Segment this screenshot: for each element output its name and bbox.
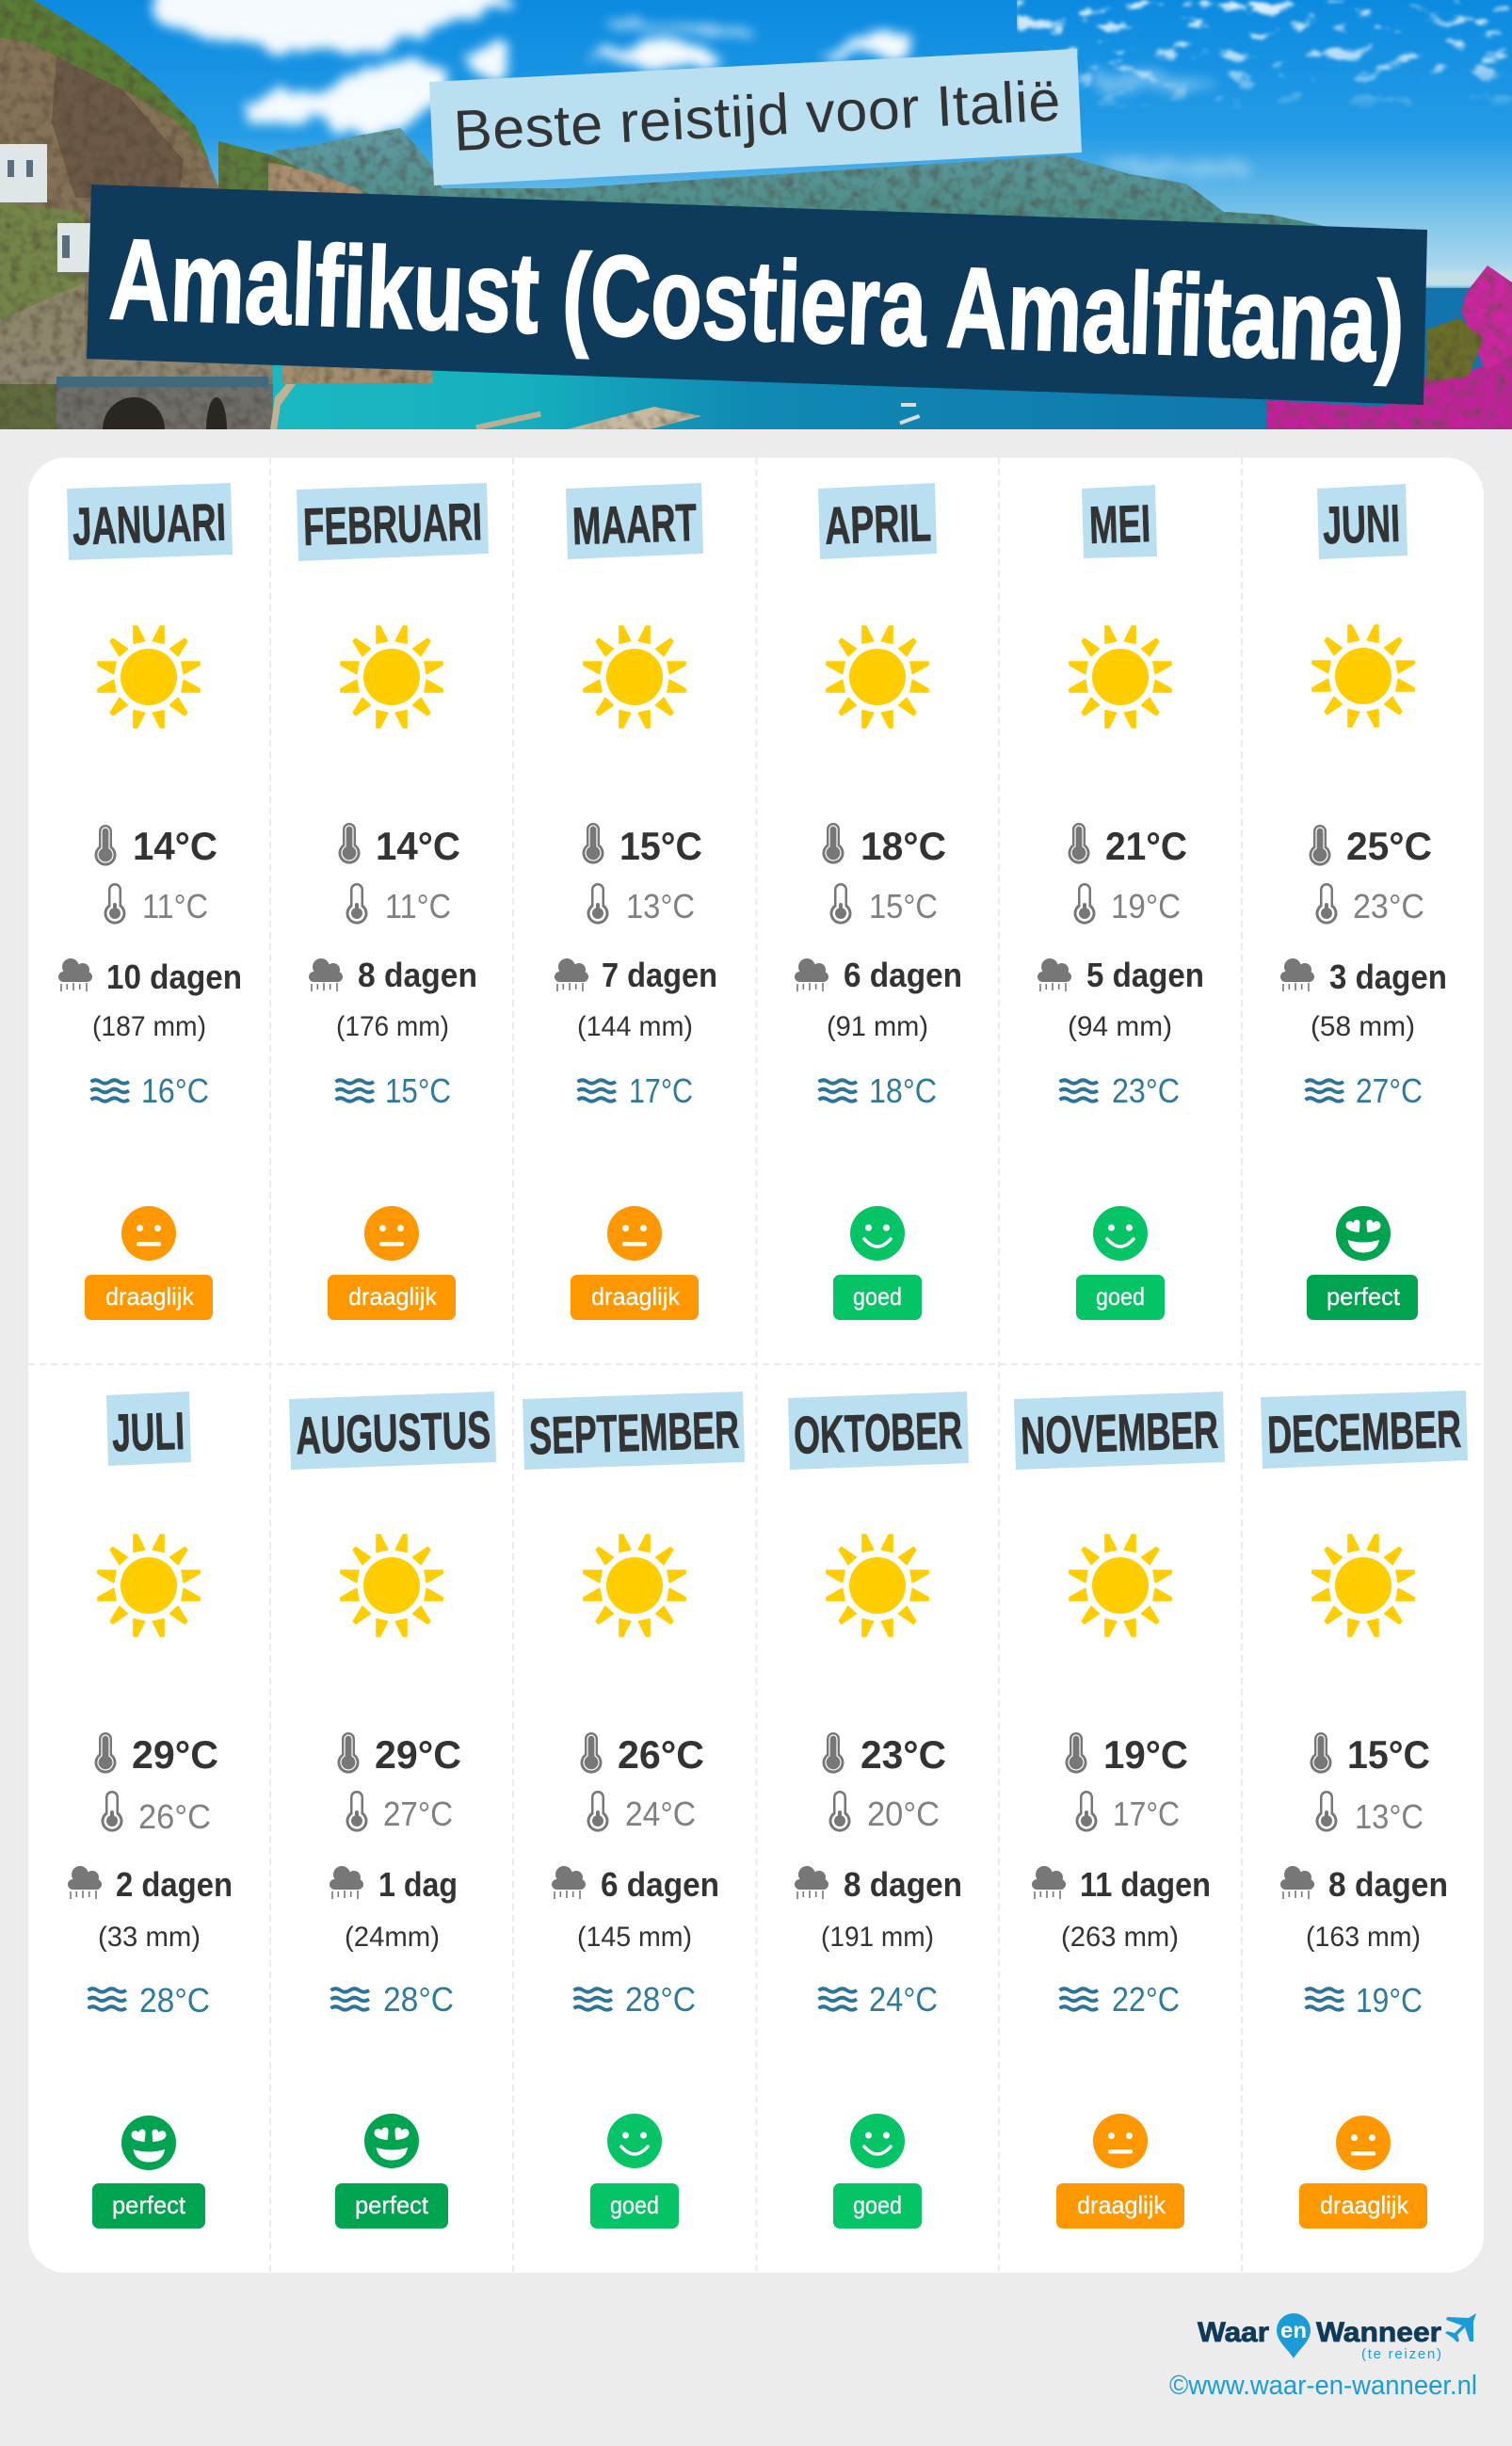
panel: climate table	[28, 458, 1484, 2273]
low temperature: 20°C	[867, 1794, 940, 1833]
sea temperature: 15°C	[385, 1071, 451, 1110]
sea	[273, 284, 1472, 429]
low temperature: 26°C	[138, 1797, 211, 1836]
rainfall: (91 mm)	[827, 1011, 928, 1042]
high temperature	[1066, 1732, 1188, 1777]
rain days	[552, 1865, 719, 1904]
sea temperature: 19°C	[1356, 1981, 1423, 2020]
low temperature	[1316, 883, 1424, 925]
low temperature	[1316, 1791, 1424, 1836]
rain days	[1032, 1865, 1211, 1904]
rating badge	[833, 1275, 922, 1320]
month: november	[1014, 1392, 1225, 2229]
icon: sun	[584, 1535, 685, 1636]
sea temperature: 22°C	[1112, 1980, 1180, 2019]
rainfall: (187 mm)	[92, 1011, 206, 1042]
low temperature: 11°C	[142, 887, 208, 925]
rain days: 6 dagen	[844, 956, 962, 994]
rating face	[121, 2116, 176, 2170]
rating face	[1336, 2116, 1391, 2170]
icon: sun	[1312, 1535, 1414, 1636]
sea temperature	[574, 1980, 696, 2019]
rain days	[330, 1865, 458, 1904]
sea temperature	[1060, 1980, 1180, 2019]
high temperature	[582, 823, 702, 868]
month: augustus	[289, 1392, 496, 2229]
rating badge: perfect	[355, 2191, 429, 2219]
rain days	[309, 956, 477, 994]
high temperature	[1068, 823, 1187, 868]
low temperature: 27°C	[383, 1794, 453, 1833]
month: september	[523, 1392, 745, 2229]
cliff	[0, 0, 218, 356]
rain days	[555, 956, 717, 994]
high temperature	[580, 1732, 704, 1777]
high temperature	[94, 1732, 218, 1777]
sea temperature: 23°C	[1112, 1071, 1180, 1110]
logo: Waar en Wanneer: (te reizen)	[1361, 2346, 1441, 2362]
sea temperature	[819, 1071, 937, 1110]
month label: JULI	[111, 1401, 185, 1462]
high temperature	[1311, 1732, 1430, 1777]
month: maart	[555, 483, 717, 1320]
breakwater and boats	[567, 407, 701, 429]
sea temperature: 28°C	[383, 1980, 454, 2019]
rain days: 2 dagen	[116, 1865, 233, 1904]
sea temperature	[88, 1981, 210, 2020]
month label	[818, 483, 937, 559]
month label	[297, 483, 489, 561]
month label	[1014, 1392, 1225, 1470]
rating badge	[1056, 2183, 1184, 2229]
month label: MEI	[1088, 493, 1151, 555]
high temperature: 23°C	[861, 1732, 946, 1777]
icon: map pin: en	[1280, 2318, 1307, 2342]
low temperature: 11°C	[385, 887, 451, 925]
icon: sun	[341, 626, 442, 728]
icon: sun	[341, 1535, 442, 1636]
sea temperature	[819, 1980, 938, 2019]
rain days	[1037, 956, 1204, 994]
rating badge: draaglijk	[105, 1282, 195, 1311]
low temperature: 19°C	[1111, 887, 1181, 925]
low temperature	[346, 883, 451, 925]
low temperature	[587, 1791, 696, 1833]
high temperature: 19°C	[1103, 1732, 1188, 1777]
sea temperature: 17°C	[629, 1071, 693, 1110]
month label: APRIL	[824, 492, 932, 555]
rating badge	[833, 2183, 922, 2229]
low temperature	[828, 1791, 940, 1833]
icon: sun	[827, 626, 928, 728]
rain days: 8 dagen	[1328, 1865, 1448, 1904]
month: juni	[1280, 484, 1447, 1320]
rating face	[607, 2114, 662, 2168]
rating face	[364, 1206, 419, 1261]
month label: AUGUSTUS	[295, 1400, 491, 1465]
rainfall: (33 mm)	[98, 1922, 201, 1953]
rating badge	[85, 1275, 213, 1320]
rating badge: perfect	[112, 2191, 186, 2219]
rating badge: perfect	[1327, 1282, 1401, 1311]
rain days	[795, 956, 962, 994]
logo: Waar en Wanneer: Waar	[1198, 2317, 1269, 2348]
rain days	[68, 1865, 233, 1904]
rain days: 1 dag	[378, 1865, 458, 1904]
high temperature	[337, 1732, 461, 1777]
month: mei	[1037, 485, 1204, 1320]
logo: Waar en Wanneer: Wanneer	[1316, 2317, 1441, 2348]
rain days	[1280, 957, 1447, 996]
high temperature: 29°C	[375, 1732, 461, 1777]
rating badge: draaglijk	[1077, 2191, 1166, 2219]
rating face	[364, 2114, 419, 2168]
month label	[788, 1392, 969, 1470]
month: januari	[58, 483, 242, 1320]
rain days: 5 dagen	[1086, 956, 1204, 994]
sea temperature: 28°C	[625, 1980, 696, 2019]
sea temperature	[90, 1071, 209, 1110]
rain days: 8 dagen	[358, 956, 477, 994]
rain days	[58, 957, 242, 996]
title banner	[87, 185, 1427, 405]
rain days	[795, 1865, 962, 1904]
high temperature	[339, 823, 460, 868]
rainfall: (176 mm)	[336, 1011, 449, 1042]
icon: map pin	[1277, 2313, 1311, 2358]
month label	[289, 1392, 496, 1470]
rating badge: draaglijk	[591, 1282, 681, 1311]
website credit: ©www.waar-en-wanneer.nl	[1169, 2371, 1477, 2401]
month label	[523, 1392, 745, 1470]
high temperature: 14°C	[133, 824, 217, 868]
icon: sun	[1312, 625, 1414, 727]
rating face	[1093, 1206, 1148, 1261]
sea temperature: 28°C	[139, 1981, 210, 2020]
rain days: 11 dagen	[1080, 1865, 1211, 1904]
month: februari	[297, 483, 489, 1320]
sea temperature: 24°C	[869, 1980, 938, 2019]
month label: SEPTEMBER	[528, 1400, 740, 1466]
high temperature	[1309, 824, 1432, 868]
rating badge	[328, 1275, 456, 1320]
rain days: 8 dagen	[844, 1865, 962, 1904]
rating badge	[1076, 1275, 1165, 1320]
low temperature: 13°C	[1355, 1797, 1424, 1836]
rainfall: (163 mm)	[1306, 1922, 1421, 1953]
rating badge	[1299, 2183, 1427, 2229]
icon: sun	[1070, 1535, 1171, 1636]
rainfall: (24mm)	[345, 1922, 440, 1953]
high temperature: 21°C	[1105, 824, 1187, 868]
icon: sun	[98, 1535, 200, 1636]
icon: sun	[584, 626, 685, 728]
month label: MAART	[571, 492, 698, 555]
high temperature: 18°C	[861, 824, 946, 868]
icon: sun	[827, 1535, 928, 1636]
bougainvillea	[1266, 266, 1512, 429]
month: december	[1261, 1391, 1468, 2229]
month label	[566, 483, 703, 559]
high temperature: 14°C	[376, 824, 460, 868]
month label	[1317, 484, 1407, 559]
coastal town	[218, 141, 369, 194]
rating face	[1336, 1206, 1391, 1261]
low temperature	[104, 883, 208, 925]
sea temperature	[1060, 1071, 1180, 1110]
high temperature: 25°C	[1346, 824, 1432, 868]
low temperature	[1075, 1791, 1180, 1833]
rating badge	[92, 2183, 205, 2229]
high temperature: 15°C	[1347, 1732, 1430, 1777]
rating badge: goed	[1096, 1282, 1145, 1311]
sea temperature: 18°C	[869, 1071, 937, 1110]
header photo: Amalfi coast	[0, 0, 1512, 461]
rain days: 6 dagen	[601, 1865, 719, 1904]
low temperature: 23°C	[1353, 887, 1424, 925]
rainfall: (145 mm)	[577, 1922, 692, 1953]
rain days: 3 dagen	[1329, 957, 1447, 996]
month label	[67, 483, 233, 560]
month: april	[795, 483, 962, 1320]
month label: JUNI	[1322, 493, 1401, 555]
sea temperature	[1305, 1071, 1423, 1110]
sea temperature: 16°C	[141, 1071, 209, 1110]
sea temperature	[1305, 1981, 1423, 2020]
rain days: 7 dagen	[602, 956, 717, 994]
rating face	[607, 1206, 662, 1261]
month: juli	[68, 1392, 233, 2229]
rating badge	[335, 2183, 448, 2229]
subtitle banner	[429, 49, 1082, 185]
rating face	[1093, 2114, 1148, 2168]
low temperature: 13°C	[626, 887, 695, 925]
month label: FEBRUARI	[302, 491, 483, 556]
subtitle text: Beste reistijd voor Italië	[452, 68, 1062, 163]
icon: sun	[1070, 626, 1171, 728]
rating badge: goed	[610, 2191, 659, 2219]
high temperature: 26°C	[618, 1732, 704, 1777]
mountains	[273, 128, 1326, 226]
low temperature	[587, 883, 695, 925]
rating badge	[571, 1275, 699, 1320]
low temperature: 17°C	[1113, 1794, 1180, 1833]
high temperature	[823, 823, 946, 868]
rainfall: (263 mm)	[1061, 1922, 1179, 1953]
high temperature	[823, 1732, 946, 1777]
rating badge: draaglijk	[1320, 2191, 1409, 2219]
low temperature: 24°C	[625, 1794, 696, 1833]
rating badge: goed	[853, 2191, 902, 2219]
rainfall: (144 mm)	[577, 1011, 693, 1042]
month label: OKTOBER	[793, 1400, 963, 1465]
rating face	[850, 1206, 905, 1261]
rating badge	[590, 2183, 679, 2229]
rating badge: goed	[853, 1282, 902, 1311]
rating face	[121, 1206, 176, 1261]
icon: sun	[98, 626, 200, 728]
sea temperature	[578, 1071, 693, 1110]
rating badge: draaglijk	[348, 1282, 438, 1311]
month: oktober	[788, 1392, 969, 2229]
rain days	[1280, 1865, 1448, 1904]
high temperature: 29°C	[132, 1732, 218, 1777]
logo: Waar en Wanneer	[1198, 2313, 1476, 2362]
rating face	[850, 2114, 905, 2168]
sea temperature	[331, 1980, 454, 2019]
month label: JANUARI	[72, 491, 227, 556]
rating badge	[1307, 1275, 1418, 1320]
rainfall: (58 mm)	[1311, 1011, 1415, 1042]
sea temperature	[335, 1071, 451, 1110]
month label	[106, 1392, 191, 1466]
sea temperature: 27°C	[1356, 1071, 1423, 1110]
low temperature	[346, 1791, 453, 1833]
low temperature	[102, 1791, 211, 1836]
rainfall: (94 mm)	[1068, 1011, 1172, 1042]
month label: NOVEMBER	[1020, 1400, 1219, 1465]
promenade and bridge	[0, 356, 433, 429]
low temperature	[1073, 883, 1181, 925]
high temperature: 15°C	[619, 824, 702, 868]
rain days: 10 dagen	[106, 957, 242, 996]
low temperature: 15°C	[869, 887, 938, 925]
high temperature	[94, 824, 217, 868]
icon: airplane	[1445, 2313, 1476, 2342]
rainfall: (191 mm)	[821, 1922, 934, 1953]
month label	[1082, 485, 1157, 558]
low temperature	[830, 883, 938, 925]
